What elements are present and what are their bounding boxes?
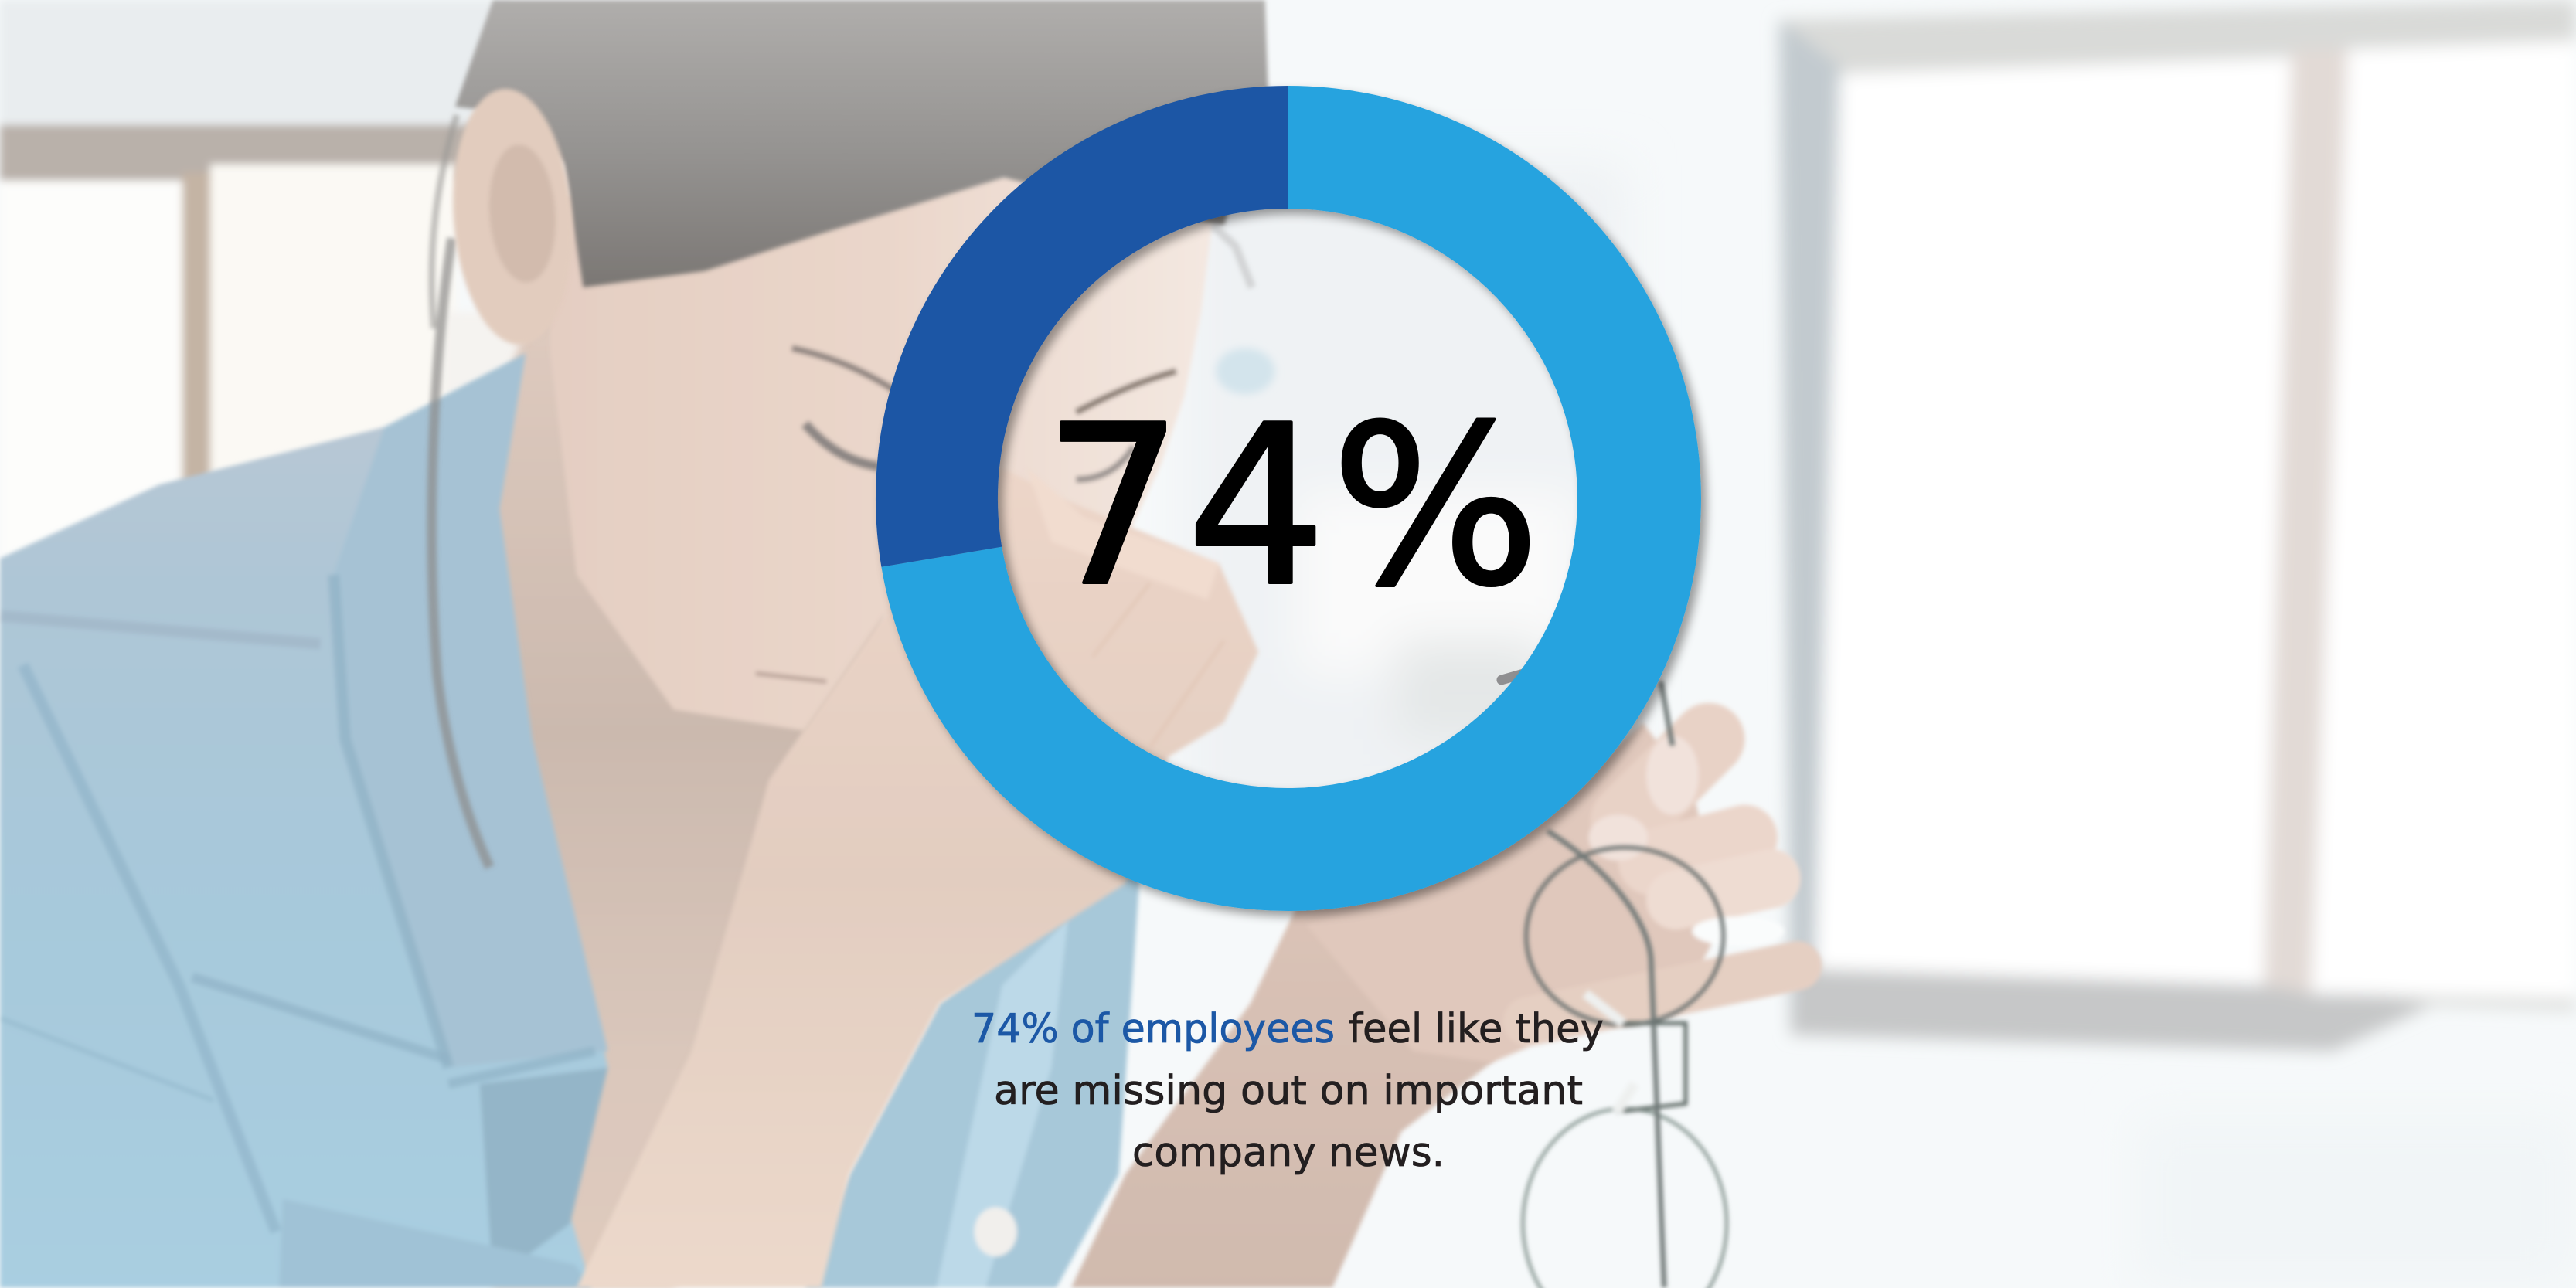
glasses arm tip (1502, 674, 1525, 680)
big number: 74% (1043, 379, 1540, 635)
caption line 2: are missing out on important (994, 1068, 1583, 1114)
caption line 1: feel like they (1349, 1006, 1604, 1052)
donut segment: 74% (881, 86, 1701, 911)
caption (972, 1006, 1604, 1176)
caption highlight: 74% of employees (972, 1006, 1335, 1052)
shirt button (975, 1207, 1017, 1256)
right window (1779, 0, 2576, 1051)
glasses (1523, 681, 1727, 1288)
area seen through the ring (1183, 165, 1626, 821)
donut segment: remaining (876, 86, 1288, 567)
hand holding glasses (1306, 722, 1797, 1062)
shirt front, right of arm (805, 871, 1140, 1288)
fingers (1626, 739, 1709, 821)
arm and hand on face (577, 468, 1258, 1288)
ear (444, 85, 580, 348)
neck (468, 279, 887, 1288)
right forearm (1071, 838, 1560, 1288)
floor shade (2135, 1116, 2576, 1288)
bluish blur in the distance (1216, 348, 1274, 394)
donut chart: 74% (876, 86, 1701, 911)
face (550, 165, 1216, 731)
inner ear (485, 142, 560, 284)
shirt (0, 353, 607, 1288)
left window (0, 0, 526, 575)
caption line 3: company news. (1132, 1130, 1445, 1176)
hair (432, 0, 1268, 867)
